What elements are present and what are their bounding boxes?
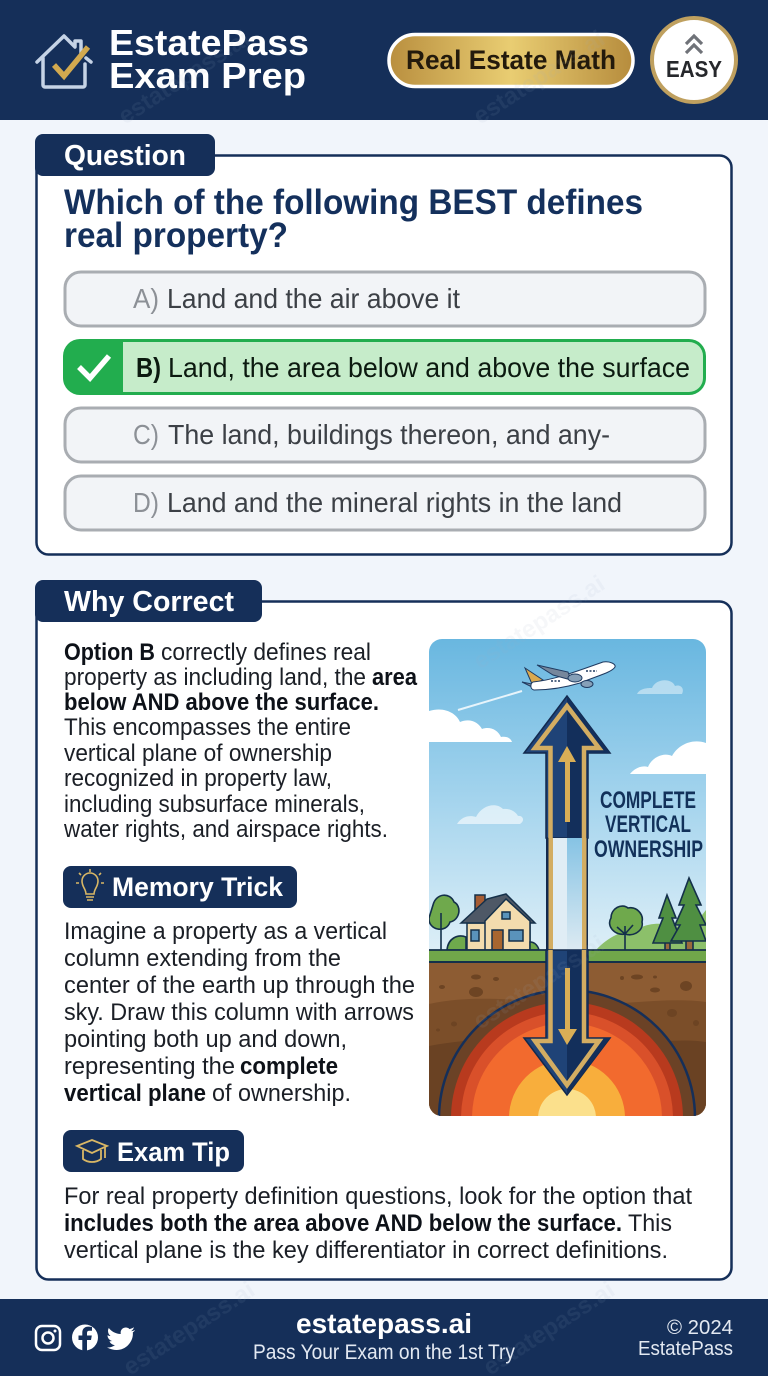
exam tip badge: Exam Tip	[117, 1137, 230, 1167]
watermarks: estatepass.ai	[469, 25, 610, 130]
earth core layers	[438, 990, 696, 1116]
difficulty badge: EASY	[666, 56, 722, 82]
brand title	[109, 22, 309, 96]
memory trick badge	[63, 866, 297, 908]
option A: A)	[133, 283, 159, 314]
option C: The land, buildings thereon, and any-	[168, 419, 610, 450]
watermarks	[114, 25, 620, 1376]
option D: D)	[133, 487, 159, 518]
icon: house with checkmark logo	[37, 36, 91, 87]
memory trick text: vertical plane	[64, 1080, 206, 1107]
explanation text	[63, 639, 417, 843]
footer brand: Pass Your Exam on the 1st Try	[253, 1341, 515, 1364]
explanation text: property as including land, the	[64, 664, 366, 691]
exam tip text: includes both the area above AND below the surface.	[64, 1210, 622, 1237]
question tab: Question	[64, 140, 186, 172]
category pill	[389, 34, 633, 86]
exam tip badge	[63, 1130, 244, 1172]
explanation text: below AND above the surface.	[64, 689, 379, 716]
category pill: Real Estate Math	[406, 45, 616, 75]
ground and soil layers	[429, 950, 706, 1116]
copyright: EstatePass	[638, 1337, 733, 1360]
trees left	[429, 895, 466, 950]
trees right	[610, 878, 706, 951]
footer brand: estatepass.ai	[296, 1308, 472, 1339]
explanation text: water rights, and airspace rights.	[63, 816, 388, 843]
option A: Land and the air above it	[167, 283, 460, 314]
arrow shaft middle	[546, 838, 588, 950]
illustration label: VERTICAL	[605, 811, 691, 838]
question heading: real property?	[64, 216, 288, 255]
memory trick badge: Memory Trick	[112, 872, 284, 902]
exam tip text: For real property definition questions, look for the option that	[64, 1183, 692, 1210]
illustration label: COMPLETE	[600, 787, 696, 814]
explanation text: Option B	[64, 639, 155, 666]
panel: question	[35, 134, 732, 554]
contrail	[458, 691, 522, 710]
copyright: © 2024	[667, 1316, 733, 1339]
option A	[65, 272, 705, 326]
question tab	[35, 134, 215, 176]
house	[461, 894, 539, 950]
distant hills	[596, 910, 706, 950]
difficulty badge	[652, 18, 736, 102]
memory trick text: representing the	[64, 1053, 235, 1080]
panel: why correct	[35, 580, 732, 1280]
memory trick text: column extending from the	[64, 945, 341, 972]
exam tip text: This	[628, 1210, 672, 1237]
watermarks: estatepass.ai	[469, 930, 610, 1035]
option C	[65, 408, 705, 462]
footer brand	[253, 1308, 515, 1364]
arrow: up	[524, 696, 610, 838]
arrow: down	[524, 950, 610, 1095]
copyright	[638, 1316, 733, 1360]
explanation text: including subsurface minerals,	[64, 791, 365, 818]
memory trick text: sky. Draw this column with arrows	[64, 999, 414, 1026]
explanation text: recognized in property law,	[64, 765, 332, 792]
icon: instagram	[36, 1326, 60, 1350]
option D: Land and the mineral rights in the land	[167, 487, 622, 518]
memory trick text: pointing both up and down,	[64, 1026, 347, 1053]
option C: C)	[133, 419, 159, 450]
icon: check mark	[79, 356, 109, 378]
icon: graduation cap	[77, 1140, 107, 1162]
illustration: complete vertical ownership	[429, 639, 706, 1116]
explanation text: vertical plane of ownership	[64, 740, 332, 767]
header	[0, 0, 768, 120]
airplane	[522, 662, 615, 690]
watermarks: estatepass.ai	[114, 25, 255, 130]
memory trick text: complete	[240, 1053, 338, 1080]
illustration label	[594, 791, 702, 857]
memory trick text	[64, 918, 415, 1107]
question heading	[64, 183, 643, 255]
why correct tab: Why Correct	[64, 586, 234, 618]
memory trick text: center of the earth up through the	[64, 972, 415, 999]
option D	[65, 476, 705, 530]
exam tip text: vertical plane is the key differentiator in correct definitions.	[64, 1237, 668, 1264]
explanation text: This encompasses the entire	[64, 714, 351, 741]
option B correct: B)	[136, 352, 161, 383]
question heading: Which of the following BEST defines	[64, 183, 643, 222]
exam tip text	[64, 1183, 692, 1264]
icon: light bulb	[76, 869, 104, 900]
option B correct: Land, the area below and above the surface	[168, 352, 690, 383]
brand title: Exam Prep	[109, 55, 306, 96]
icon: twitter	[107, 1327, 135, 1350]
footer	[0, 1299, 768, 1376]
explanation text: area	[372, 664, 417, 691]
explanation text: correctly defines real	[161, 639, 371, 666]
option B correct	[63, 339, 706, 395]
why correct tab	[35, 580, 262, 622]
brand title: EstatePass	[109, 22, 309, 63]
illustration label: OWNERSHIP	[594, 836, 703, 863]
memory trick text: of ownership.	[212, 1080, 351, 1107]
watermarks: estatepass.ai	[469, 570, 610, 675]
clouds	[429, 680, 706, 824]
memory trick text: Imagine a property as a vertical	[64, 918, 387, 945]
icon: facebook	[72, 1324, 98, 1350]
